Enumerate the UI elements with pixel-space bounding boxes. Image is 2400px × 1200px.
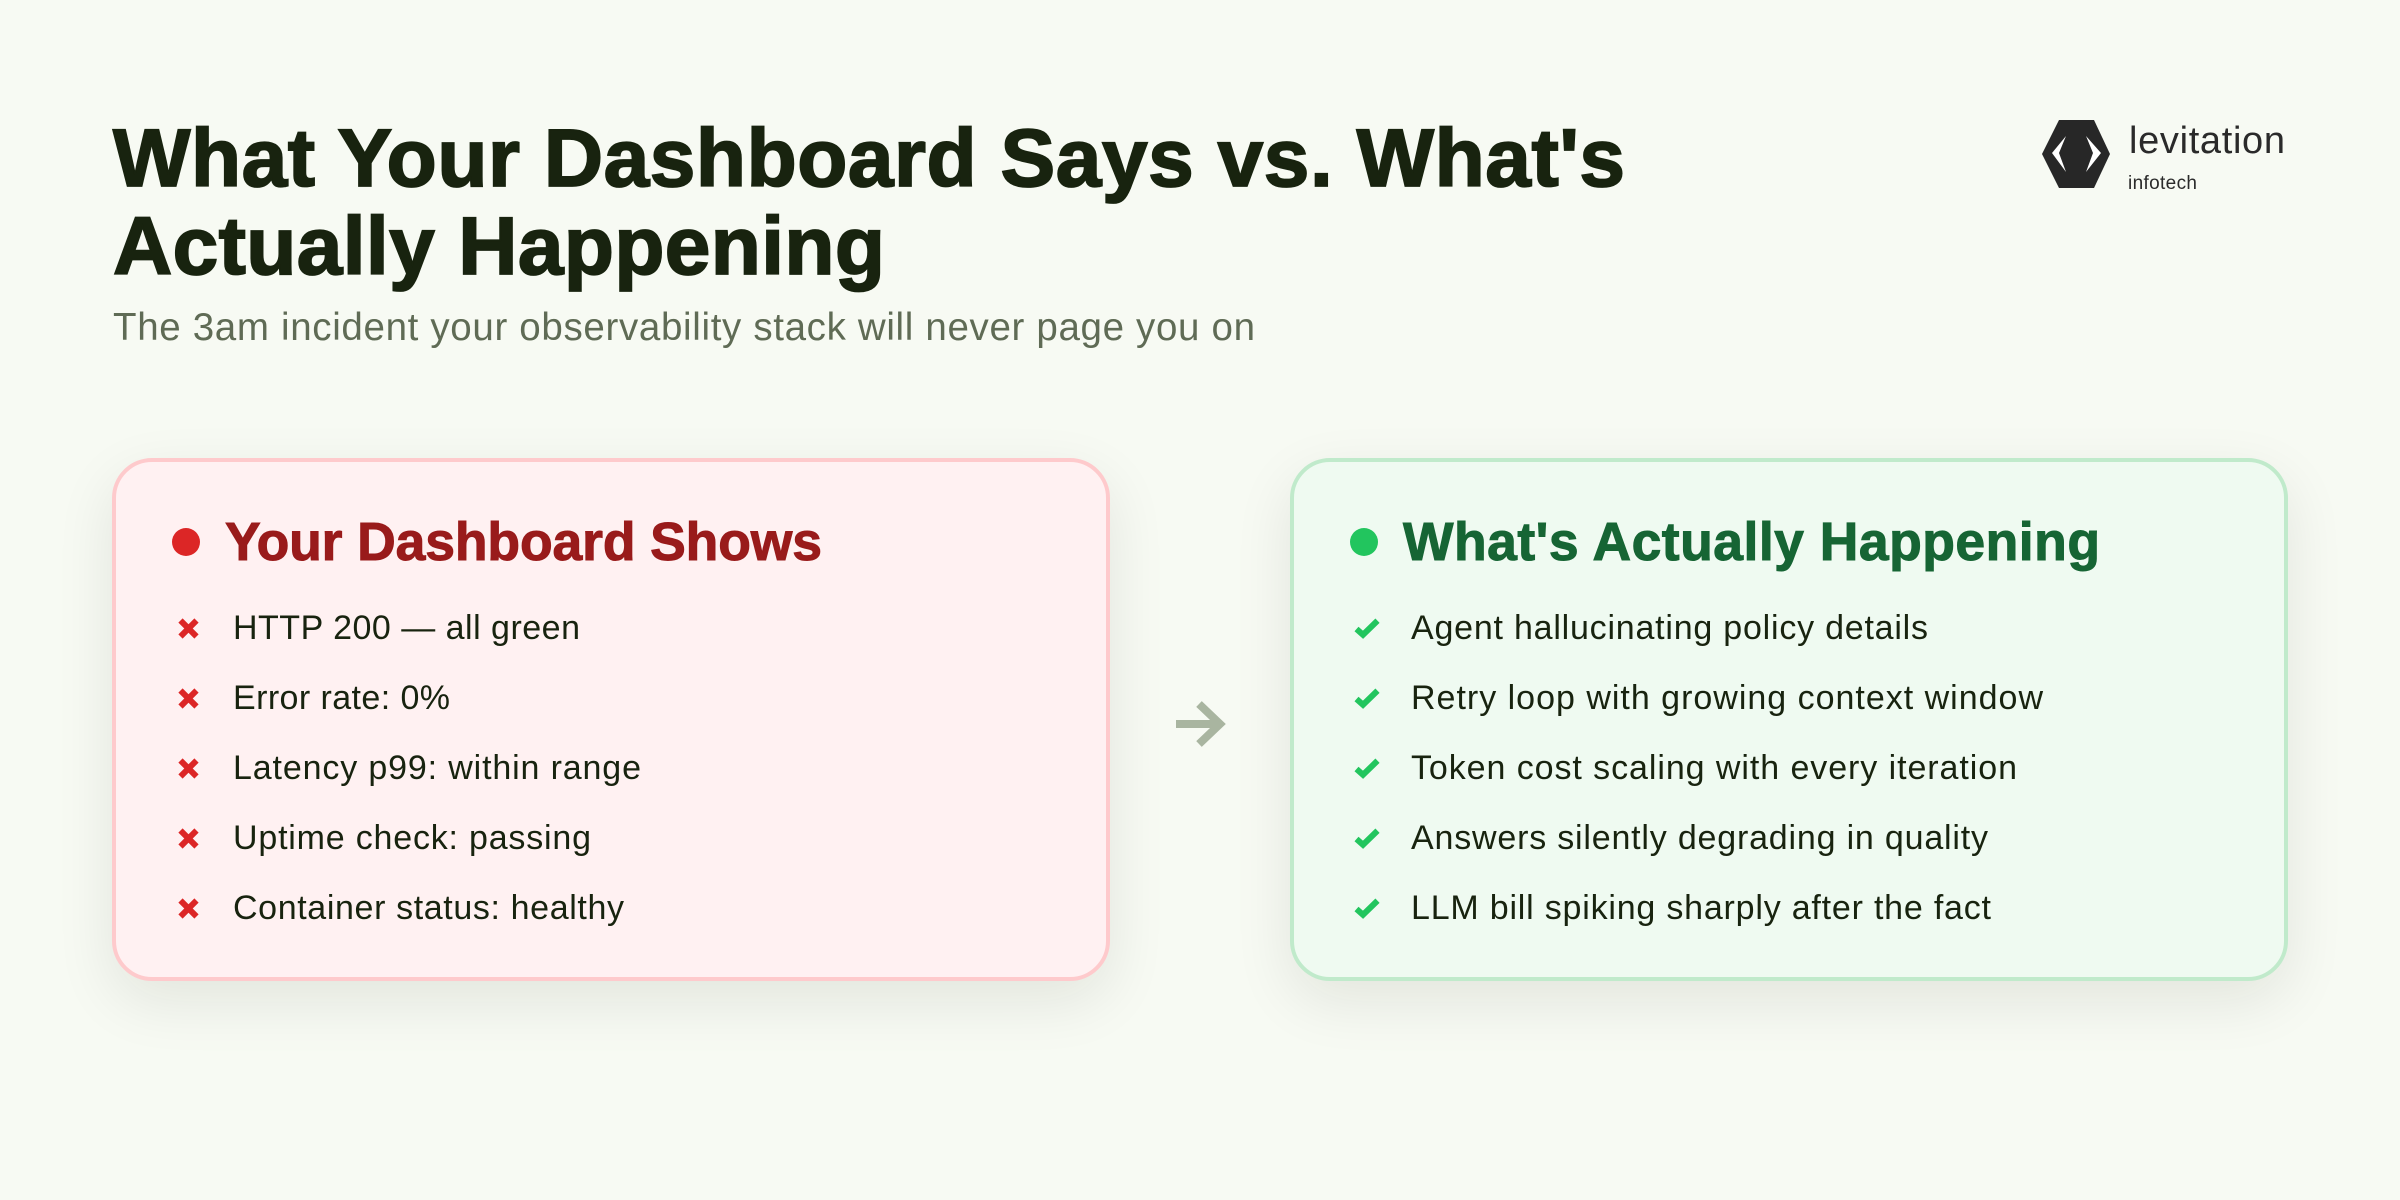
list item: latency: Latency p99: within range: [233, 749, 641, 787]
title: Actually Happening: [113, 201, 885, 292]
list item: hallucinating: Agent hallucinating policy details: [1411, 609, 1928, 647]
panel heading: What's Actually Happening: [1403, 513, 2100, 572]
list item: uptime: Uptime check: passing: [233, 819, 591, 857]
panel heading: Your Dashboard Shows: [225, 513, 822, 572]
list item: container status: Container status: healthy: [233, 889, 624, 927]
logo wordmark: levitation: [2129, 120, 2285, 162]
title: What Your Dashboard Says vs. What's: [113, 113, 1625, 204]
panel: your dashboard shows: [112, 458, 1110, 981]
list item: retry loop: Retry loop with growing context window: [1411, 679, 2043, 717]
list item: LLM bill: LLM bill spiking sharply after the fact: [1411, 889, 1992, 927]
arrow: [1176, 701, 1226, 747]
logo tagline: infotech: [2128, 173, 2197, 194]
icon: hexagon logo mark: [2042, 120, 2110, 188]
title: [112, 113, 1625, 292]
subtitle: The 3am incident your observability stack will never page you on: [113, 306, 1255, 349]
panel: what's actually happening: [1290, 458, 2288, 981]
icon: green status dot: [1350, 528, 1378, 556]
logo: levitation infotech: [2042, 120, 2285, 194]
list item: HTTP 200: HTTP 200 — all green: [233, 609, 580, 647]
list item: token cost: Token cost scaling with every iteration: [1411, 749, 2017, 787]
list item: answers degrading: Answers silently degrading in quality: [1411, 819, 1988, 857]
icon: red status dot: [172, 528, 200, 556]
list item: error rate: Error rate: 0%: [233, 679, 450, 717]
